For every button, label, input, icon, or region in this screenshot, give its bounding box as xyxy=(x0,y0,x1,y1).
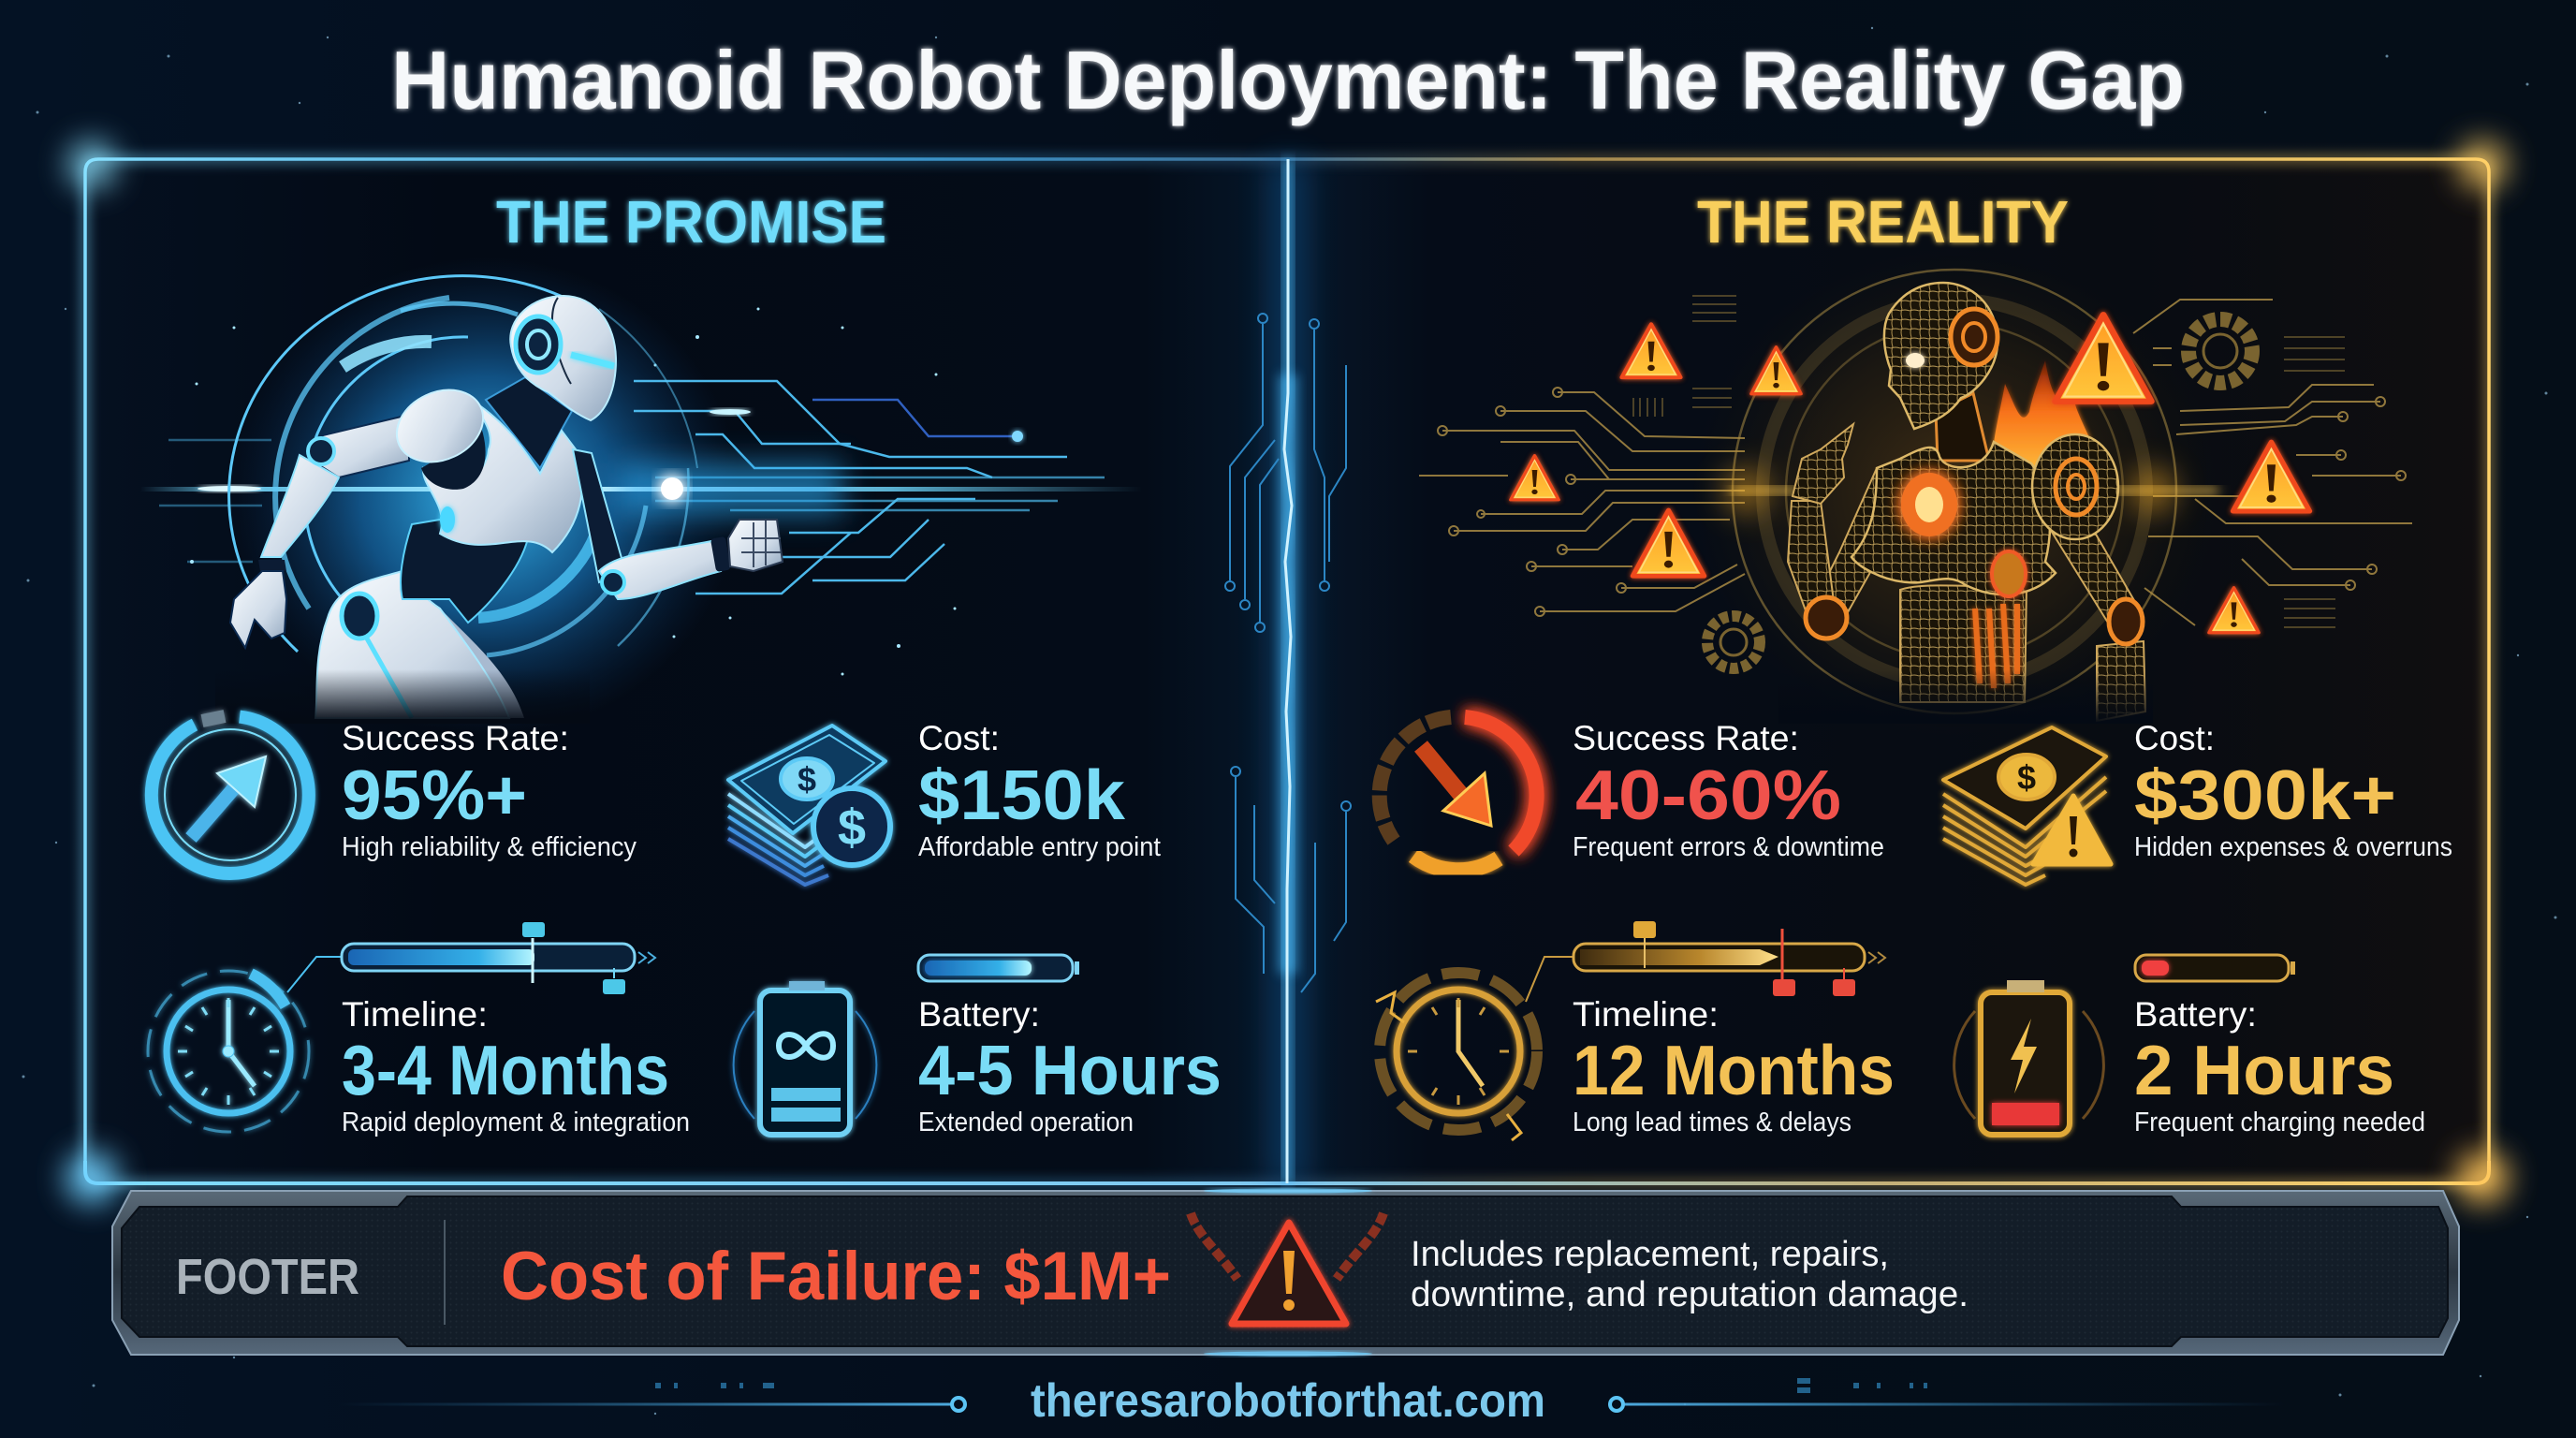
icon: clock xyxy=(148,971,309,1132)
footer label: FOOTER xyxy=(176,1249,359,1305)
delayed timeline bar xyxy=(1526,921,1885,1002)
stat: promise timeline: Timeline: xyxy=(342,995,488,1034)
chest core xyxy=(1901,473,1957,536)
currency glyphs: $ xyxy=(798,760,816,799)
stat: reality success rate xyxy=(1380,717,1884,871)
stat: promise battery xyxy=(734,955,1222,1137)
icon: battery xyxy=(734,981,876,1135)
stat: reality battery: Battery: xyxy=(2134,995,2257,1034)
circuit traces xyxy=(1225,314,1351,992)
holographic rings xyxy=(229,276,697,655)
stat: promise cost: $150k xyxy=(918,756,1125,834)
leg xyxy=(315,571,524,718)
stat: reality cost: Hidden expenses & overruns xyxy=(2134,832,2452,862)
stat: reality timeline: Long lead times & delays xyxy=(1573,1108,1852,1137)
icon: rising ring xyxy=(152,716,309,873)
currency glyph: $ xyxy=(2017,758,2036,797)
stat: promise battery: Extended operation xyxy=(918,1108,1134,1137)
stat: promise success rate xyxy=(152,716,637,873)
stat: promise timeline: 3-4 Months xyxy=(342,1031,669,1109)
armpit shade xyxy=(421,404,486,490)
stat: reality battery: Frequent charging needed xyxy=(2134,1108,2425,1137)
stat: promise cost: $ xyxy=(838,800,866,856)
warning mark xyxy=(2070,816,2077,844)
stat: reality timeline: 12 Months xyxy=(1573,1031,1895,1109)
eye xyxy=(1906,353,1925,368)
flames xyxy=(1993,360,2098,477)
gears xyxy=(1707,319,2252,668)
stat: promise cost xyxy=(728,719,1161,885)
light streaks and circuit lines xyxy=(159,381,1105,594)
rings xyxy=(1733,270,2176,713)
footer description: downtime, and reputation damage. xyxy=(1411,1275,1969,1314)
cost of failure: Cost of Failure: $1M+ xyxy=(501,1239,1171,1314)
center divider xyxy=(1225,159,1351,1183)
website link decoration xyxy=(338,1381,2284,1411)
warning dot xyxy=(2069,848,2078,858)
stat: reality cost: Cost: xyxy=(2134,719,2215,757)
stat: reality timeline xyxy=(1376,921,1895,1140)
front arm xyxy=(573,449,783,599)
sparks xyxy=(190,307,957,676)
data glyph blocks xyxy=(1633,296,2345,627)
circuit lines xyxy=(1419,300,2412,625)
timeline bar xyxy=(287,922,655,994)
footer bar xyxy=(112,1189,2459,1356)
illustration: running silver robot xyxy=(140,257,1142,735)
footer description: Includes replacement, repairs, xyxy=(1411,1235,1889,1274)
stat: promise battery: 4-5 Hours xyxy=(918,1031,1222,1109)
stat: reality battery xyxy=(1954,955,2425,1137)
stat: reality timeline: Timeline: xyxy=(1573,995,1719,1034)
stat: promise timeline xyxy=(148,922,690,1137)
stat: reality success rate: 40-60% xyxy=(1575,756,1841,834)
neck xyxy=(486,377,572,468)
stat: promise success rate: High reliability & efficiency xyxy=(342,832,637,862)
chest xyxy=(1852,442,2056,594)
stat: reality cost xyxy=(1943,719,2452,885)
battery bar xyxy=(918,955,1079,981)
battery bar xyxy=(2135,955,2295,981)
lower torso and ribs xyxy=(1900,585,2027,702)
stat: reality success rate: Success Rate: xyxy=(1573,719,1799,757)
warning triangles xyxy=(1511,315,2309,633)
chest light xyxy=(440,506,455,533)
icon: cash stack and coin xyxy=(728,726,890,885)
icon: low battery xyxy=(1954,980,2103,1135)
stat: reality cost: $300k+ xyxy=(2134,756,2396,834)
icon: cracked clock xyxy=(1376,973,1537,1140)
website url: theresarobotforthat.com xyxy=(1031,1374,1545,1427)
shoulder xyxy=(385,376,495,476)
stat: promise success rate: Success Rate: xyxy=(342,719,569,757)
neck xyxy=(1936,393,1989,461)
head xyxy=(510,296,616,420)
icon: falling ring xyxy=(1380,717,1537,871)
back arm xyxy=(230,415,409,648)
pelvis xyxy=(401,520,529,623)
stat: promise battery: Battery: xyxy=(918,995,1040,1034)
icon: cash stack and warning xyxy=(1943,727,2111,885)
arms xyxy=(1788,424,2145,721)
stat: promise cost: Affordable entry point xyxy=(918,832,1161,862)
stat: promise timeline: Rapid deployment & integration xyxy=(342,1108,690,1137)
torso xyxy=(423,400,582,552)
heading: the reality: THE REALITY xyxy=(1697,188,2069,256)
shoulder xyxy=(2032,434,2118,539)
stat: promise cost: Cost: xyxy=(918,719,1000,757)
title: Humanoid Robot Deployment: The Reality Gap xyxy=(391,34,2185,126)
glowing joints xyxy=(1806,309,2143,644)
light flares xyxy=(1732,488,1797,493)
panel frame xyxy=(66,140,2509,1204)
stat: reality success rate: Frequent errors & downtime xyxy=(1573,832,1884,862)
icon: chained warning xyxy=(1191,1213,1383,1324)
stat: promise success rate: 95%+ xyxy=(342,756,527,834)
head xyxy=(1884,283,1998,429)
heading: the promise: THE PROMISE xyxy=(496,188,886,256)
footer description xyxy=(1411,1235,1969,1314)
illustration: damaged wireframe robot xyxy=(1419,248,2412,735)
stat: reality battery: 2 Hours xyxy=(2134,1031,2394,1109)
